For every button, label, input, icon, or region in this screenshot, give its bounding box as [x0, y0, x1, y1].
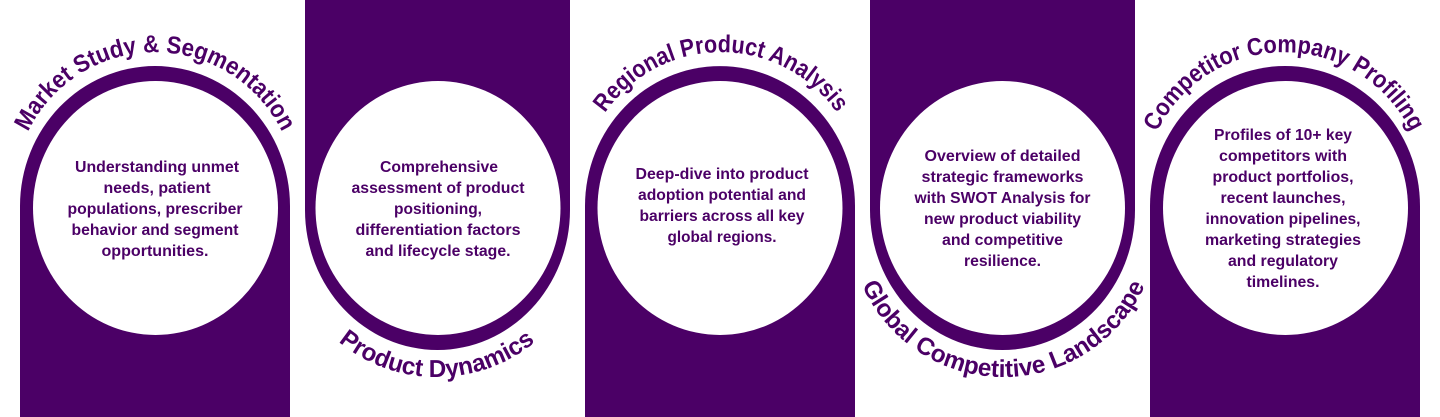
heading: Regional Product Analysis — [592, 34, 846, 112]
white ellipse — [880, 81, 1125, 335]
description: global regions. — [668, 229, 776, 246]
description: assessment of product — [352, 180, 525, 197]
description: with SWOT Analysis for — [914, 190, 1090, 207]
description — [914, 148, 1090, 270]
description: adoption potential and — [638, 187, 806, 204]
description: competitors with — [1219, 148, 1347, 165]
description: and regulatory — [1228, 253, 1338, 270]
description: Deep-dive into product — [636, 166, 809, 183]
description: recent launches, — [1220, 190, 1346, 207]
description: Comprehensive — [380, 159, 498, 176]
panel: global competitive landscape — [864, 0, 1144, 378]
description: and lifecycle stage. — [366, 243, 510, 260]
description: needs, patient — [104, 180, 211, 197]
heading: Global Competitive Landscape — [864, 281, 1144, 378]
description: marketing strategies — [1205, 232, 1361, 249]
panel: regional product analysis — [585, 34, 855, 417]
heading: Product Dynamics — [340, 329, 533, 382]
heading: Competitor Company Profiling — [1144, 38, 1422, 132]
white ellipse — [598, 81, 842, 335]
description: Profiles of 10+ key — [1214, 127, 1352, 144]
description: positioning, — [394, 201, 482, 218]
inverted arch shape — [870, 0, 1135, 350]
description: Understanding unmet — [75, 159, 240, 176]
panel: market study and segmentation — [14, 35, 292, 417]
description: opportunities. — [102, 243, 208, 260]
description: differentiation factors — [356, 222, 521, 239]
description: behavior and segment — [72, 222, 239, 239]
description: product portfolios, — [1212, 169, 1354, 186]
arch shape — [1150, 66, 1420, 417]
white ellipse — [33, 81, 278, 335]
inverted arch shape — [305, 0, 570, 350]
description — [636, 166, 809, 246]
description: strategic frameworks — [922, 169, 1084, 186]
description — [68, 159, 242, 260]
description — [352, 159, 525, 260]
arch shape — [20, 66, 290, 417]
description: timelines. — [1246, 274, 1320, 291]
description: new product viability — [924, 211, 1081, 228]
description: Overview of detailed — [924, 148, 1080, 165]
panel: product dynamics — [305, 0, 570, 382]
description: barriers across all key — [640, 208, 805, 225]
white ellipse — [1163, 81, 1408, 335]
description: populations, prescriber — [68, 201, 242, 218]
heading: Market Study & Segmentation — [14, 35, 292, 131]
description: resilience. — [964, 253, 1041, 270]
description — [1205, 127, 1361, 291]
panel: competitor company profiling — [1144, 38, 1422, 417]
arch shape — [585, 66, 855, 417]
description: innovation pipelines, — [1206, 211, 1360, 228]
white ellipse — [316, 81, 560, 335]
description: and competitive — [942, 232, 1063, 249]
